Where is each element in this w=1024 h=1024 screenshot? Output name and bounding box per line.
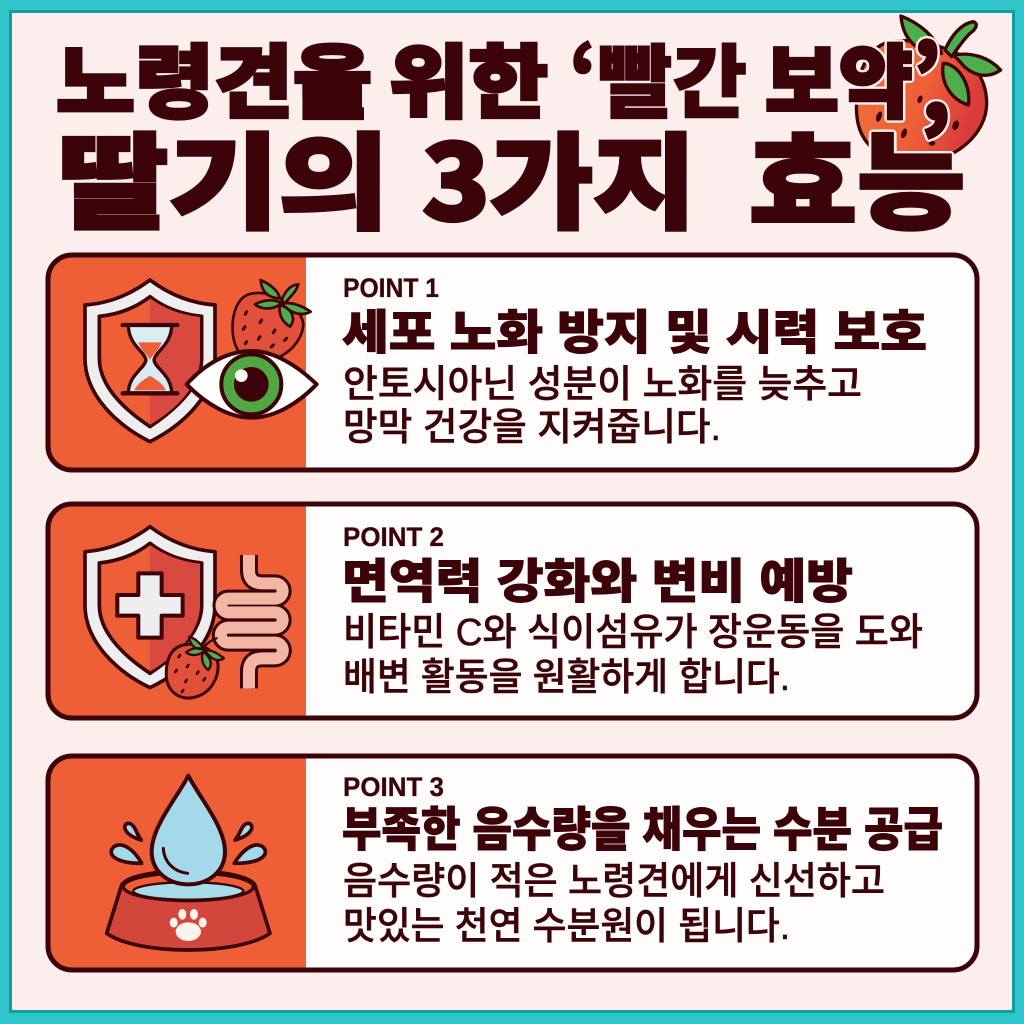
title line 1: 보약’: [765, 19, 941, 135]
icon: title strawberry: [856, 16, 1001, 163]
icon: shield with cross, strawberry and intestine: [85, 527, 283, 698]
point 3 label: POINT 3: [343, 772, 444, 802]
title line 1: 보약’: [765, 19, 941, 135]
title line 2: 효능: [749, 99, 965, 250]
point 2 heading: 면역력 강화와 변비 예방: [342, 543, 853, 612]
point 3 body: 음수량이 적은 노령견에게 신선하고: [343, 861, 885, 903]
title line 1: ‘빨간: [569, 19, 747, 135]
title line 2: 3가지: [422, 99, 696, 250]
title line 1: 노령견을: [56, 19, 372, 135]
intestine: [221, 555, 283, 688]
title line 2: [58, 99, 965, 250]
panel: point 3: [48, 756, 977, 970]
panel: point 1: [48, 255, 977, 470]
point 2 body: 배변 활동을 원활하게 합니다.: [343, 657, 790, 699]
panel: point 2: [48, 504, 977, 718]
point 1 heading: 세포 노화 방지 및 시력 보호: [342, 294, 927, 363]
title line 1: ,: [922, 26, 950, 142]
point 3 body: [343, 861, 885, 948]
paw print: [170, 909, 207, 941]
title line 1: 위한: [389, 19, 548, 135]
title line 2: 효능: [749, 99, 965, 250]
point 3 heading: 부족한 음수량을 채우는 수분 공급: [342, 791, 943, 860]
point 2 body: 비타민 C와 식이섬유가 장운동을 도와: [343, 612, 923, 654]
title line 1: ,: [922, 26, 950, 142]
icon: shield with hourglass, strawberry and eye: [85, 280, 317, 442]
point 1 label: POINT 1: [343, 273, 439, 303]
title line 2: 딸기의: [58, 99, 389, 250]
point 1 body: 안토시아닌 성분이 노화를 늦추고: [343, 364, 862, 406]
point 2 body: [343, 612, 923, 699]
point 3 body: 맛있는 천연 수분원이 됩니다.: [343, 906, 790, 948]
point 2 label: POINT 2: [343, 522, 444, 552]
icon: water drop and dog bowl: [107, 776, 270, 950]
title line 1: [56, 19, 950, 142]
point 1 body: [343, 364, 862, 449]
point 1 body: 망막 건강을 지켜줍니다.: [343, 407, 721, 449]
title: [56, 19, 965, 250]
